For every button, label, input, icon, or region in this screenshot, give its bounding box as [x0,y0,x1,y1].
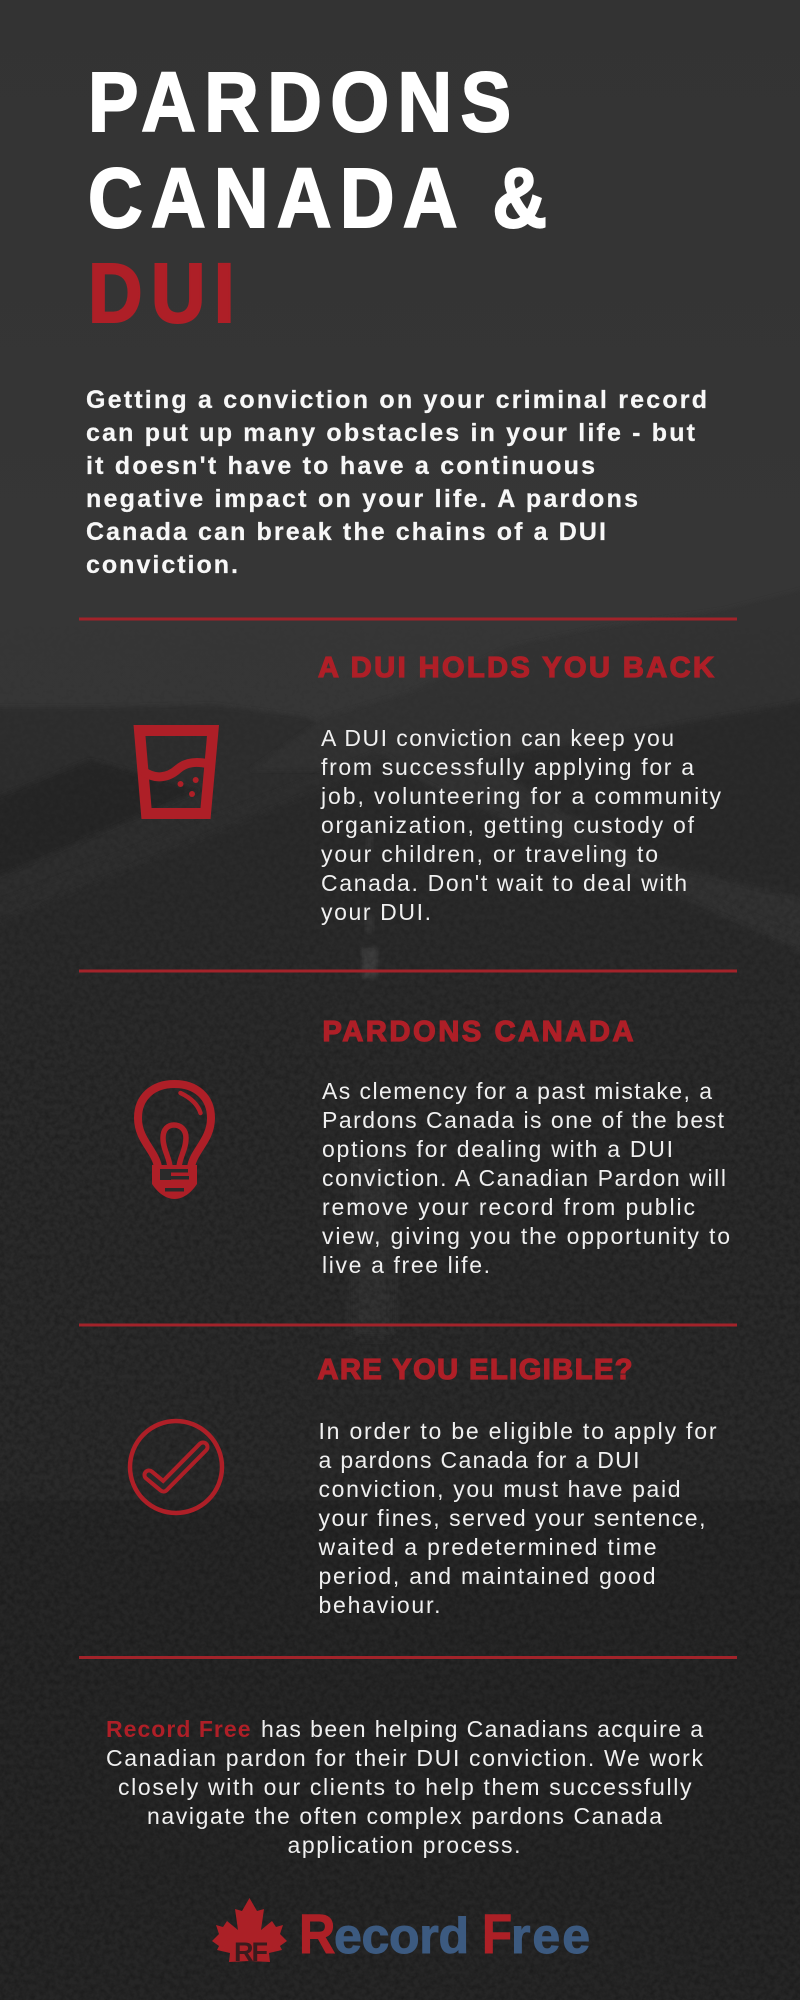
icon: maple leaf [212,1898,287,1967]
panel: pardons canada [138,1016,730,1278]
body text: pardons canada: Pardons Canada is one of the best [322,1107,725,1133]
body text: pardons canada: live a free life. [322,1252,490,1278]
body text: a DUI holds you back: Canada. Don't wait to deal with [321,870,687,896]
footer paragraph: navigate the often complex pardons Canada [147,1803,662,1829]
body text: are you eligible: your fines, served your sentence, [318,1505,706,1531]
intro paragraph: it doesn't have to have a continuous [86,452,595,480]
icon: light bulb [138,1084,211,1199]
footer paragraph [106,1716,704,1858]
wordmark [299,1903,590,1966]
body text: pardons canada: conviction. A Canadian Pardon will [322,1165,726,1191]
intro paragraph [86,386,707,579]
heading: pardons canada: PARDONS CANADA [322,1016,634,1048]
intro paragraph: negative impact on your life. A pardons [86,485,638,513]
panel: a DUI holds you back [140,652,722,925]
body text: pardons canada: options for dealing with a DUI [322,1136,673,1162]
title: DUI [88,246,235,340]
body text: a DUI holds you back: A DUI conviction can keep you [321,725,674,751]
intro paragraph: Canada can break the chains of a DUI [86,518,606,546]
logo: Record Free [212,1898,590,1967]
footer paragraph: Record Free [106,1716,250,1742]
footer paragraph: application process. [288,1832,520,1858]
body text: are you eligible: conviction, you must have paid [318,1476,680,1502]
body text: a DUI holds you back [320,725,722,925]
body text: are you eligible [318,1418,717,1618]
body text: a DUI holds you back: from successfully applying for a [321,754,694,780]
body text: are you eligible: behaviour. [318,1592,440,1618]
body text: are you eligible: In order to be eligible to apply for [318,1418,717,1444]
icon: glass of liquid [140,730,213,814]
body text: are you eligible: waited a predetermined time [318,1534,656,1560]
body text: a DUI holds you back: job, volunteering for a community [320,783,722,809]
wordmark: R [299,1904,335,1966]
body text: a DUI holds you back: organization, getting custody of [321,812,695,838]
heading: a DUI holds you back: A DUI HOLDS YOU BACK [318,652,714,684]
intro paragraph: Getting a conviction on your criminal record [86,386,707,414]
wordmark: F [482,1903,512,1966]
body text: a DUI holds you back: your children, or traveling to [321,841,658,867]
body text: pardons canada [322,1078,730,1278]
intro paragraph: conviction. [86,551,238,579]
wordmark: ecord [334,1908,469,1964]
title [88,55,547,340]
icon: maple leaf: RF [234,1937,268,1967]
body text: are you eligible: a pardons Canada for a DUI [318,1447,640,1473]
icon: check mark in circle [130,1421,222,1513]
body text: are you eligible: period, and maintained good [318,1563,656,1589]
title: PARDONS [88,55,511,149]
title: CANADA & [88,151,547,245]
body text: pardons canada: remove your record from public [322,1194,695,1220]
footer paragraph: has been helping Canadians acquire a [261,1716,703,1742]
body text: pardons canada: As clemency for a past mistake, a [322,1078,712,1104]
intro paragraph: can put up many obstacles in your life - but [86,419,696,447]
panel: are you eligible [130,1354,717,1618]
heading: are you eligible: ARE YOU ELIGIBLE? [318,1354,632,1386]
footer paragraph: Canadian pardon for their DUI conviction. We work [106,1745,704,1771]
wordmark: ree [511,1908,590,1964]
body text: a DUI holds you back: your DUI. [321,899,431,925]
body text: pardons canada: view, giving you the opportunity to [322,1223,730,1249]
footer paragraph: closely with our clients to help them successfully [118,1774,692,1800]
